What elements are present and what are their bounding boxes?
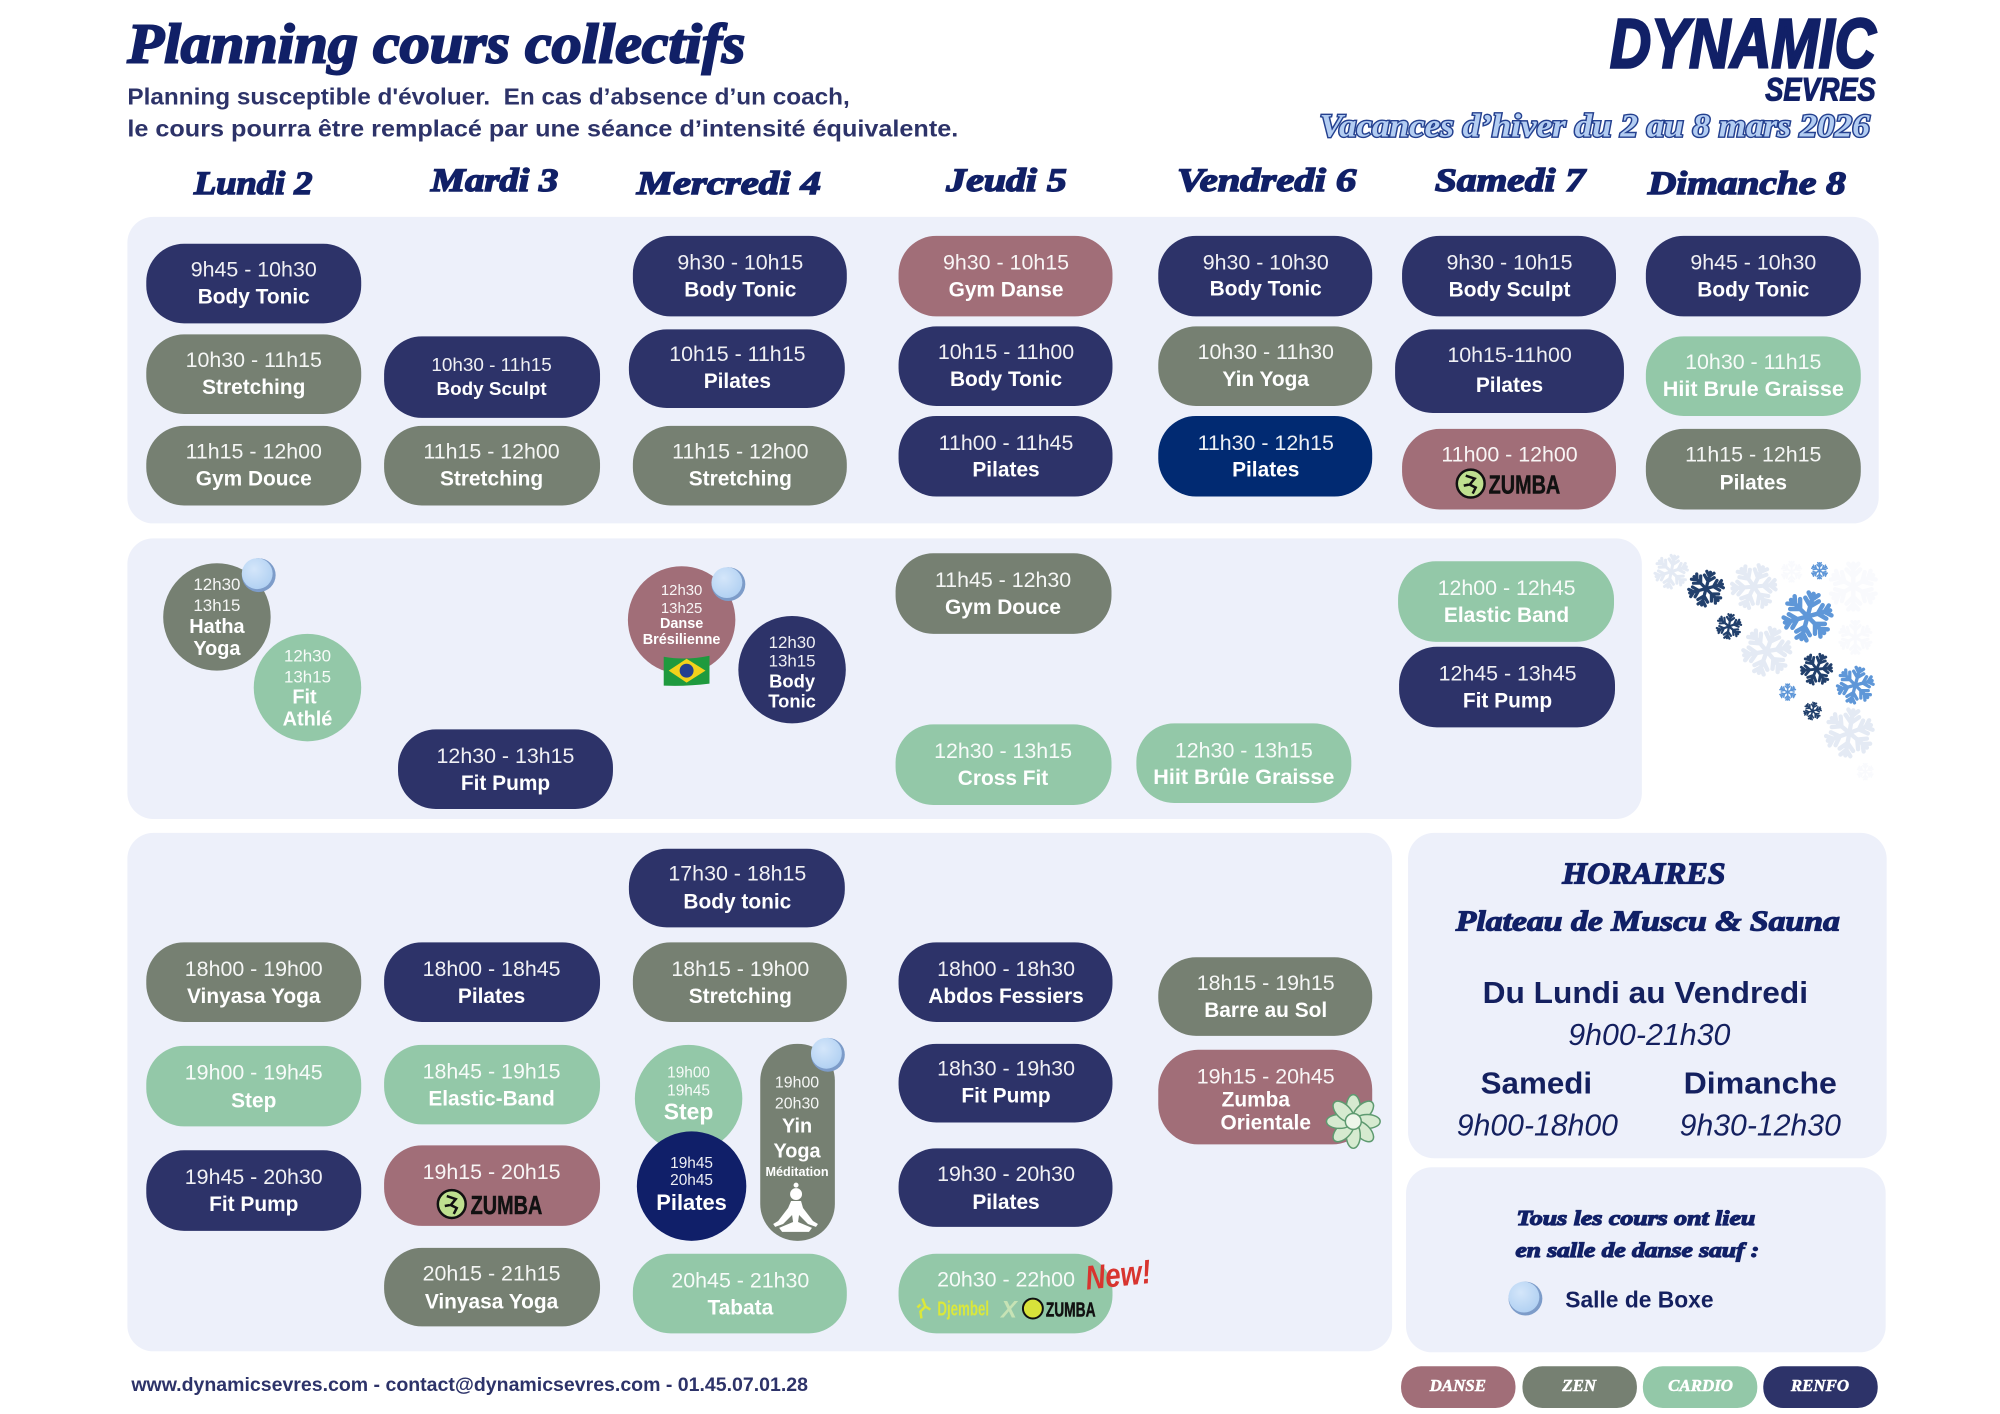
class: Dimanche Pilates: Pilates [1720, 472, 1787, 495]
class: Lundi Fit Athlé: 13h15 [284, 668, 331, 687]
class: Mardi Stretching: 11h15 - 12h00 [423, 440, 560, 464]
class: Mardi Stretching: Stretching [440, 468, 543, 491]
class: Lundi Hatha Yoga: 12h30 [193, 575, 240, 594]
text: Saturday hours [1457, 1066, 1618, 1142]
class: Samedi Zumba: ZUMBA [1489, 472, 1560, 500]
class: Mercredi Body Tonic: 12h30 [769, 633, 816, 652]
text: weekday hours: Du Lundi au Vendredi [1483, 975, 1808, 1010]
class: Jeudi Body Tonic [899, 326, 1112, 406]
class: Mardi Elastic-Band [384, 1045, 600, 1124]
icon: snowflakes [1652, 553, 1877, 780]
subtitle: Planning susceptible d'évoluer. En cas d’absence d’un coach, [127, 83, 850, 109]
class: Jeudi Pilates: 19h30 - 20h30 [937, 1162, 1075, 1186]
class: Mercredi Body Tonic: Tonic [768, 690, 816, 711]
class: Jeudi Gym Danse: 9h30 - 10h15 [943, 251, 1069, 275]
class: Mercredi Yin Yoga Méditation: Méditation [765, 1165, 829, 1179]
panel: opening hours [1408, 833, 1887, 1158]
class: Jeudi Fit Pump: Fit Pump [961, 1085, 1051, 1108]
heading: Horaires: HORAIRES [1561, 857, 1725, 891]
class: Jeudi Cross Fit: 12h30 - 13h15 [934, 739, 1072, 763]
class: Mardi Fit Pump: Fit Pump [461, 772, 550, 795]
day headings: Dimanche 8 [1647, 166, 1846, 202]
class: Lundi Stretching: Stretching [202, 376, 305, 399]
heading: Plateau de Muscu & Sauna: Plateau de Muscu & Sauna [1455, 905, 1840, 937]
text: Sunday hours: Dimanche [1684, 1066, 1837, 1101]
class: Lundi Fit Athlé: 12h30 [284, 647, 331, 666]
day headings: Mardi 3 [430, 163, 558, 199]
class: Mercredi Pilates: 20h45 [670, 1172, 713, 1189]
class: Mercredi Stretching: 18h15 - 19h00 [671, 957, 809, 981]
class: Mercredi Pilates: 19h45 [670, 1155, 713, 1172]
class: Jeudi Abdos Fessiers: 18h00 - 18h30 [937, 957, 1075, 981]
class: Vendredi Yin Yoga: Yin Yoga [1222, 368, 1309, 391]
class: Mercredi Tabata [633, 1254, 847, 1333]
class: Vendredi Zumba Orientale: 19h15 - 20h45 [1197, 1065, 1335, 1089]
day headings: Samedi 7 [1435, 163, 1587, 199]
class: Mercredi Body Tonic: 9h30 - 10h15 [677, 251, 803, 275]
class: Mercredi Pilates [629, 329, 845, 408]
day headings: Lundi 2 [193, 166, 312, 202]
text: Salle de Boxe: Salle de Boxe [1565, 1287, 1714, 1313]
day headings: Vendredi 6 [1177, 163, 1357, 199]
class: Samedi Body Sculpt [1402, 236, 1616, 316]
class: Mercredi Tabata: 20h45 - 21h30 [671, 1269, 809, 1293]
class: Vendredi Body Tonic [1158, 236, 1372, 316]
class: Mercredi Tabata: Tabata [707, 1296, 774, 1319]
holiday dates: Vacances d’hiver du 2 au 8 mars 2026 [1319, 108, 1870, 144]
class: Mercredi Danse Brésilienne: 12h30 [661, 582, 702, 599]
class: Mardi Pilates: Pilates [458, 985, 525, 1008]
class: Mercredi Stretching: Stretching [689, 985, 792, 1008]
class: Jeudi Djembel x Zumba: 20h30 - 22h00 [937, 1268, 1075, 1292]
class: Mercredi Body Tonic: 13h15 [769, 652, 816, 671]
panel: room note [1406, 1167, 1886, 1352]
class: Lundi Fit Pump [146, 1150, 361, 1231]
class: Mercredi Danse Brésilienne [628, 566, 745, 686]
text: room note: Tous les cours ont lieu [1516, 1206, 1755, 1230]
class: Samedi Pilates [1395, 329, 1624, 413]
legend item: Cardio [1643, 1366, 1757, 1408]
class: Dimanche Hiit: 10h30 - 11h15 [1685, 350, 1821, 374]
class: Lundi Vinyasa Yoga: Vinyasa Yoga [187, 985, 321, 1008]
footer contact line: www.dynamicsevres.com - contact@dynamicsevres.com - 01.45.07.01.28 [130, 1374, 808, 1396]
class: Mercredi Body tonic: 17h30 - 18h15 [668, 862, 806, 886]
legend item: Zen [1522, 1366, 1637, 1408]
text: room note [1515, 1206, 1759, 1262]
class: Samedi Elastic Band: 12h00 - 12h45 [1438, 576, 1575, 600]
text: Sunday hours [1680, 1066, 1841, 1142]
class: Mardi Vinyasa Yoga: 20h15 - 21h15 [423, 1262, 561, 1286]
class: Samedi Fit Pump: Fit Pump [1463, 689, 1552, 712]
logo: Dynamic Sevres [1610, 5, 1877, 108]
class: Samedi Zumba [1402, 429, 1616, 509]
class: Lundi Gym Douce: 11h15 - 12h00 [186, 440, 322, 464]
class: Mercredi Body Tonic: Body [769, 671, 816, 692]
legend item: Cardio: CARDIO [1668, 1376, 1733, 1395]
class: Mercredi Step: 19h00 [667, 1065, 710, 1082]
class: Jeudi Abdos Fessiers [899, 942, 1112, 1022]
class: Samedi Zumba: 11h00 - 12h00 [1441, 443, 1578, 467]
class: Mercredi Body Tonic: Body Tonic [684, 279, 796, 302]
class: Dimanche Body Tonic: 9h45 - 10h30 [1690, 251, 1816, 275]
legend item: Renfo: RENFO [1790, 1376, 1849, 1395]
text: weekday hours: 9h00-21h30 [1568, 1017, 1730, 1052]
class: Jeudi Djembel x Zumba: ZUMBA [1046, 1299, 1096, 1321]
class: Jeudi Gym Danse [899, 236, 1112, 316]
class: Lundi Fit Athlé [254, 634, 361, 741]
legend item: Zen: ZEN [1561, 1376, 1597, 1395]
class: Vendredi Barre au Sol: 18h15 - 19h15 [1197, 971, 1335, 995]
class: Lundi Vinyasa Yoga [146, 942, 361, 1022]
class: Mardi Vinyasa Yoga: Vinyasa Yoga [425, 1291, 559, 1314]
class: Jeudi Body Tonic: Body Tonic [950, 368, 1062, 391]
class: Vendredi Body Tonic: 9h30 - 10h30 [1203, 251, 1329, 275]
class: Samedi Fit Pump: 12h45 - 13h45 [1439, 662, 1576, 686]
class: Mercredi Yin Yoga Méditation: Yin [782, 1115, 812, 1137]
legend item: Renfo [1763, 1366, 1878, 1408]
legend item: Danse: DANSE [1429, 1376, 1486, 1395]
class: Lundi Fit Pump: Fit Pump [209, 1193, 298, 1216]
class: Mardi Pilates: 18h00 - 18h45 [423, 957, 561, 981]
class: Mardi Body Sculpt: Body Sculpt [436, 379, 547, 400]
class: Jeudi Fit Pump: 18h30 - 19h30 [937, 1057, 1075, 1081]
icon: Brazil flag [664, 656, 709, 686]
class: Vendredi Pilates [1158, 416, 1372, 497]
class: Samedi Fit Pump [1399, 647, 1615, 727]
class: Mercredi Yin Yoga Méditation: Yoga [773, 1140, 822, 1162]
class: Jeudi Abdos Fessiers: Abdos Fessiers [928, 985, 1084, 1008]
class: Vendredi Pilates: Pilates [1232, 459, 1299, 482]
class: Mercredi Body tonic: Body tonic [683, 891, 791, 914]
class: Lundi Vinyasa Yoga: 18h00 - 19h00 [185, 957, 323, 981]
class: Lundi Fit Athlé: Athlé [283, 708, 332, 730]
class: Dimanche Hiit [1646, 336, 1861, 416]
class: Mercredi Stretching: Stretching [689, 468, 792, 491]
class: Mardi Vinyasa Yoga [384, 1248, 600, 1326]
class: Mercredi Step: 19h45 [667, 1083, 710, 1100]
class: Mardi Body Sculpt [384, 336, 600, 418]
class: Vendredi Body Tonic: Body Tonic [1210, 278, 1322, 301]
legend [1401, 1366, 1878, 1408]
class: Mercredi Step: Step [664, 1098, 713, 1124]
class: Lundi Hatha Yoga [163, 558, 276, 671]
legend item: Danse [1401, 1366, 1515, 1408]
icon: boxing room marker [1509, 1282, 1542, 1315]
class: Jeudi Pilates: 11h00 - 11h45 [939, 431, 1073, 455]
class: Dimanche Pilates: 11h15 - 12h15 [1685, 443, 1821, 467]
class: Lundi Hatha Yoga: 13h15 [193, 596, 240, 615]
class: Lundi Body Tonic: 9h45 - 10h30 [191, 258, 317, 282]
class: Jeudi Djembel x Zumba [899, 1253, 1153, 1333]
class: Jeudi Cross Fit: Cross Fit [958, 767, 1048, 790]
text: Saturday hours: 9h00-18h00 [1457, 1107, 1618, 1142]
class: Mercredi Body Tonic [738, 616, 846, 723]
class: Lundi Fit Athlé: Fit [292, 687, 317, 709]
logo: Dynamic Sevres: DYNAMIC [1610, 5, 1877, 83]
class: Mardi Fit Pump: 12h30 - 13h15 [437, 744, 574, 768]
class: Jeudi Gym Douce [896, 553, 1111, 634]
class: Lundi Step: 19h00 - 19h45 [185, 1061, 323, 1085]
class: Lundi Gym Douce [146, 426, 361, 505]
class: Mercredi Pilates: Pilates [704, 370, 771, 393]
class: Mardi Zumba [384, 1145, 600, 1226]
class: Lundi Step: Step [231, 1090, 276, 1113]
class: Mercredi Stretching [633, 426, 847, 505]
class: Dimanche Hiit: Hiit Brule Graisse [1663, 378, 1844, 401]
class: Vendredi Hiit Brûle Graisse [1136, 723, 1351, 803]
class: Mardi Zumba: ZUMBA [471, 1192, 542, 1220]
class: Mercredi Body tonic [629, 849, 845, 927]
class: Mardi Zumba: 19h15 - 20h15 [423, 1160, 561, 1184]
class: Vendredi Yin Yoga: 10h30 - 11h30 [1198, 340, 1334, 364]
label: New: New! [1083, 1253, 1153, 1298]
class: Mercredi Body Tonic [633, 236, 847, 316]
class: Mercredi Danse Brésilienne: 13h25 [661, 600, 702, 617]
class: Mercredi Pilates: Pilates [656, 1190, 727, 1215]
class: Dimanche Body Tonic [1646, 236, 1861, 316]
class: Vendredi Zumba Orientale: Zumba [1222, 1089, 1290, 1112]
class: Mercredi Pilates: 10h15 - 11h15 [669, 342, 805, 366]
class: Jeudi Cross Fit [896, 724, 1111, 805]
class: Samedi Elastic Band [1398, 561, 1614, 642]
class: Vendredi Barre au Sol: Barre au Sol [1204, 999, 1327, 1022]
class: Samedi Body Sculpt: 9h30 - 10h15 [1447, 251, 1573, 275]
class: Samedi Body Sculpt: Body Sculpt [1449, 279, 1570, 302]
title: Planning cours collectifs [126, 14, 745, 76]
class: Jeudi Gym Douce: Gym Douce [945, 596, 1061, 619]
class: Mercredi Danse Brésilienne: Danse [660, 616, 703, 632]
text: room note: en salle de danse sauf : [1515, 1238, 1759, 1262]
class: Mercredi Pilates [637, 1131, 746, 1241]
text: weekday hours [1483, 975, 1808, 1052]
class: Mercredi Yin Yoga Méditation [760, 1038, 845, 1241]
class: Vendredi Yin Yoga [1158, 326, 1372, 406]
logo: Dynamic Sevres: SEVRES [1765, 71, 1876, 108]
class: Lundi Hatha Yoga: Hatha [189, 616, 245, 638]
day headings: Mercredi 4 [636, 166, 821, 202]
class: Mardi Fit Pump [398, 729, 613, 809]
class: Mardi Body Sculpt: 10h30 - 11h15 [431, 355, 552, 376]
class: Jeudi Pilates: Pilates [972, 1191, 1040, 1214]
class: Vendredi Zumba Orientale [1158, 1050, 1380, 1148]
class: Mardi Elastic-Band: 18h45 - 19h15 [423, 1060, 561, 1084]
class: Jeudi Gym Douce: 11h45 - 12h30 [935, 568, 1071, 592]
class: Vendredi Barre au Sol [1158, 957, 1372, 1036]
class: Vendredi Hiit Brûle Graisse: Hiit Brûle Graisse [1153, 766, 1334, 789]
class: Lundi Stretching: 10h30 - 11h15 [186, 348, 322, 372]
class: Jeudi Gym Danse: Gym Danse [949, 279, 1063, 302]
class: Jeudi Pilates [899, 1148, 1112, 1227]
class: Mercredi Danse Brésilienne: Brésilienne [643, 632, 720, 648]
day headings [193, 163, 1846, 202]
class: Lundi Fit Pump: 19h45 - 20h30 [185, 1165, 323, 1189]
class: Samedi Elastic Band: Elastic Band [1444, 604, 1569, 627]
class: Mercredi Yin Yoga Méditation: 19h00 [775, 1075, 819, 1092]
text: Sunday hours: 9h30-12h30 [1680, 1107, 1841, 1142]
subtitle: le cours pourra être remplacé par une séance d’intensité équivalente. [127, 115, 958, 141]
class: Dimanche Pilates [1646, 429, 1861, 509]
class: Mercredi Yin Yoga Méditation: 20h30 [775, 1096, 819, 1113]
class: Jeudi Pilates [899, 416, 1112, 497]
panel: midday classes [127, 538, 1642, 819]
class: Jeudi Body Tonic: 10h15 - 11h00 [938, 340, 1074, 364]
class: Mercredi Stretching [633, 942, 847, 1022]
class: Vendredi Zumba Orientale: Orientale [1220, 1111, 1311, 1134]
class: Lundi Step [146, 1046, 361, 1126]
icon: mandala [1326, 1095, 1380, 1148]
class: Lundi Body Tonic [146, 244, 361, 323]
class: Jeudi Pilates: Pilates [972, 459, 1040, 482]
icon: meditation figure [773, 1183, 818, 1232]
subtitle [127, 83, 958, 141]
class: Samedi Pilates: Pilates [1476, 374, 1543, 397]
text: Saturday hours: Samedi [1481, 1066, 1592, 1101]
class: Lundi Hatha Yoga: Yoga [193, 638, 241, 660]
class: Jeudi Djembel x Zumba: Djembel [937, 1298, 989, 1320]
class: Mardi Pilates [384, 942, 600, 1022]
class: Dimanche Body Tonic: Body Tonic [1697, 279, 1809, 302]
class: Mardi Elastic-Band: Elastic-Band [428, 1088, 555, 1111]
class: Samedi Pilates: 10h15-11h00 [1447, 343, 1572, 367]
day headings: Jeudi 5 [945, 163, 1067, 199]
class: Lundi Body Tonic: Body Tonic [198, 285, 310, 308]
panel: evening classes [127, 833, 1392, 1351]
class: Mercredi Stretching: 11h15 - 12h00 [672, 440, 809, 464]
class: Mardi Stretching [384, 426, 600, 505]
panel: morning classes [127, 217, 1879, 523]
class: Lundi Gym Douce: Gym Douce [196, 468, 312, 491]
class: Vendredi Hiit Brûle Graisse: 12h30 - 13h15 [1175, 738, 1313, 762]
class: Jeudi Fit Pump [899, 1044, 1112, 1122]
class: Mercredi Step [635, 1045, 742, 1152]
class: Lundi Stretching [146, 334, 361, 414]
class: Jeudi Djembel x Zumba: X [999, 1296, 1019, 1323]
class: Vendredi Pilates: 11h30 - 12h15 [1198, 431, 1334, 455]
